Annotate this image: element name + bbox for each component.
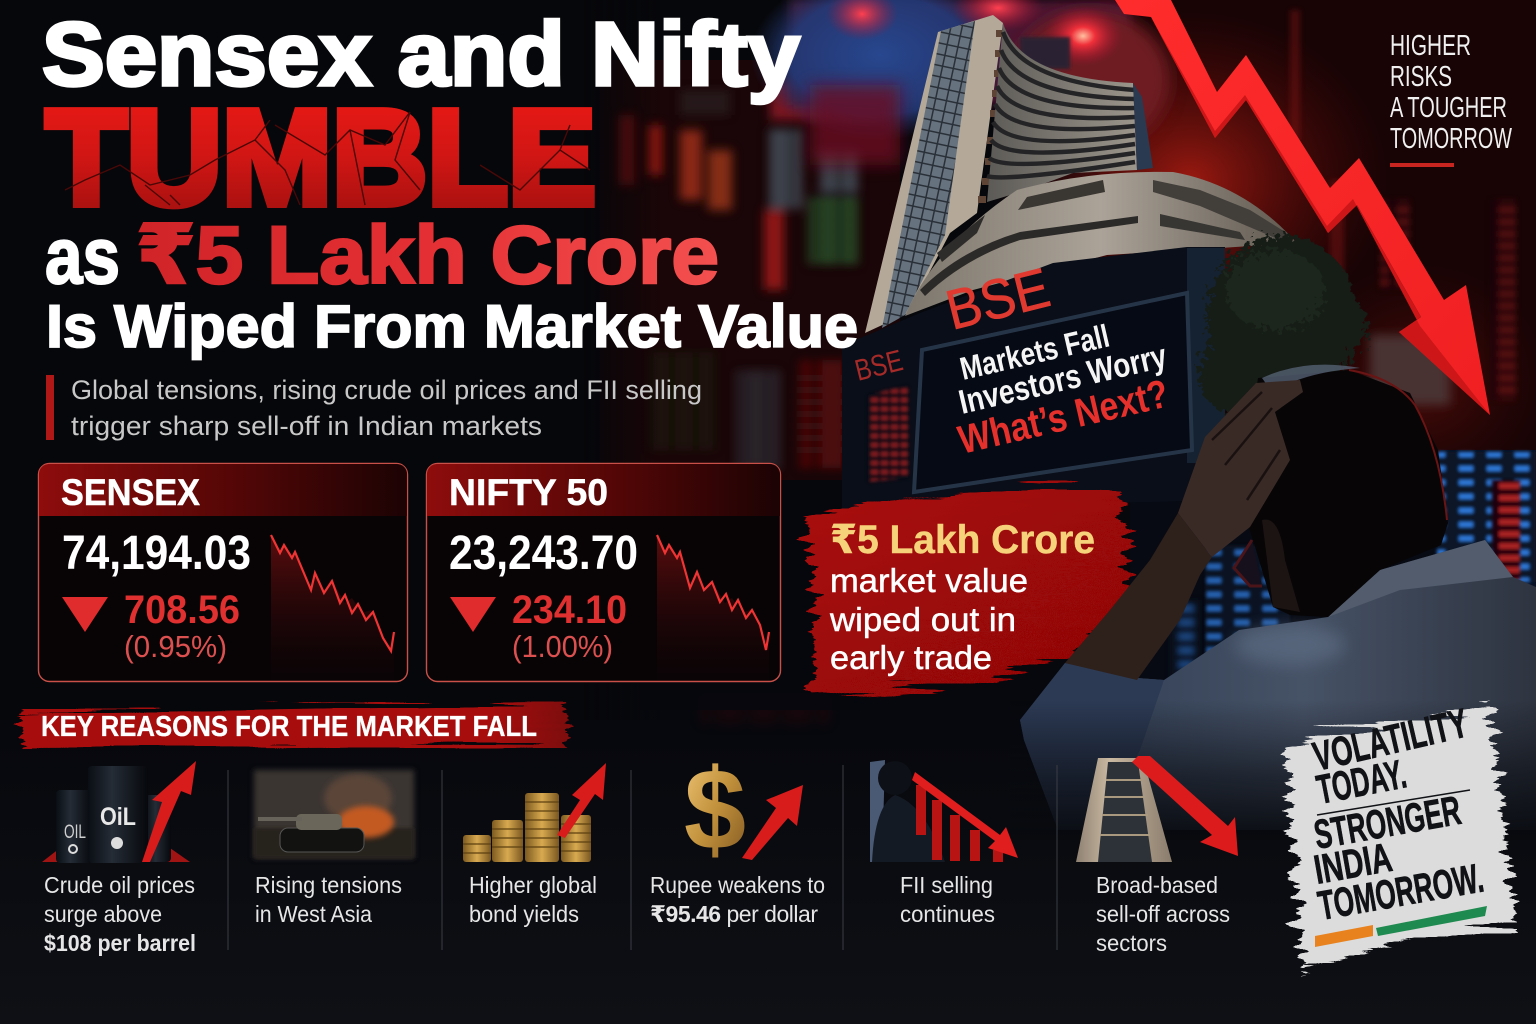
reason 3: bond yields: Higher global	[469, 872, 597, 898]
vertical dividers	[228, 765, 1057, 950]
forearm	[1065, 513, 1212, 680]
red rim light	[1349, 370, 1447, 520]
title line: Sensex and Nifty: Sensex and Nifty	[42, 5, 800, 105]
dark base	[842, 247, 1225, 510]
title line: TUMBLE: TUMBLE	[46, 82, 596, 233]
left fade	[0, 0, 580, 720]
red glow right of tower	[1100, 0, 1536, 470]
icon: oil barrels: OiL	[100, 803, 136, 831]
red up arrow	[557, 763, 606, 838]
shirt torso	[1020, 540, 1536, 830]
torn paper poster	[1284, 700, 1516, 968]
card: Sensex: 74,194.03	[62, 527, 251, 580]
reason 4: rupee: Rupee weakens to	[650, 872, 825, 898]
sparkline chart	[271, 535, 394, 680]
top right tagline	[1390, 30, 1512, 167]
reason 1: crude oil: surge above	[44, 901, 162, 927]
subtitle: trigger sharp sell-off in Indian markets	[71, 411, 542, 441]
callout: 5 lakh crore wiped: wiped out in	[829, 601, 1016, 638]
icon: coin stacks	[463, 763, 606, 862]
icon: tank in battle	[254, 770, 414, 858]
reason 1: crude oil: $108 per barrel	[44, 930, 196, 956]
card: Sensex	[38, 464, 408, 682]
top right tagline: HIGHER	[1390, 30, 1471, 62]
concrete column notches	[978, 30, 1004, 203]
reason 5: FII selling	[870, 760, 1018, 927]
icon: tower and red arrow	[1076, 756, 1238, 862]
key reasons banner: KEY REASONS FOR THE MARKET FALL	[41, 711, 537, 743]
main LED screen	[914, 293, 1192, 492]
reason 3: bond yields	[463, 763, 606, 927]
shirt collar	[1328, 540, 1513, 617]
rolled sleeve	[1020, 663, 1164, 830]
curved ribbed facade	[987, 23, 1137, 202]
card: Nifty 50: NIFTY 50	[449, 472, 608, 513]
reason 2: West Asia: Rising tensions	[255, 872, 402, 898]
reason 4: rupee: ₹95.46 per dollar	[650, 901, 818, 927]
reason 6: broad-based sell-off: sell-off across	[1096, 901, 1230, 927]
torn paper poster: INDIA	[1311, 834, 1395, 893]
neck and ear	[1262, 520, 1300, 612]
down triangle	[62, 597, 108, 632]
red up arrow	[142, 761, 196, 862]
reason 5: FII selling: FII selling	[900, 872, 993, 898]
reason 2: West Asia: in West Asia	[255, 901, 372, 927]
background: blurred market boards and red sky	[0, 0, 1536, 725]
person holding head	[1010, 365, 1536, 840]
reason 2: West Asia	[254, 770, 414, 927]
callout: 5 lakh crore wiped	[808, 485, 1130, 695]
shirt bottom fade	[1010, 700, 1536, 840]
card: Nifty 50	[426, 464, 780, 682]
card header	[39, 464, 407, 516]
tower outer frame	[865, 15, 1003, 333]
screen headline: Investors Worry	[955, 337, 1170, 422]
reason 3: bond yields: bond yields	[469, 901, 579, 927]
trading screens	[1170, 452, 1536, 695]
screen headline: Markets Fall	[956, 318, 1113, 387]
reason 4: rupee	[650, 746, 825, 927]
callout: 5 lakh crore wiped: ₹5 Lakh Crore	[830, 518, 1095, 562]
hand on head	[1178, 380, 1303, 557]
icon: oil barrels	[42, 761, 196, 863]
BSE sign: BSE	[940, 255, 1056, 342]
subtitle: Global tensions, rising crude oil prices and FII selling	[71, 375, 702, 405]
reason 5: FII selling: continues	[900, 901, 995, 927]
screen headline: What’s Next?	[954, 372, 1173, 463]
title	[42, 5, 858, 360]
dome	[905, 172, 1297, 316]
key reasons banner	[20, 703, 572, 748]
title line: as: as	[45, 211, 120, 300]
backdrop behind person	[1130, 470, 1440, 700]
card: Sensex: SENSEX	[61, 472, 200, 513]
side ticker screen	[868, 385, 908, 482]
card: Sensex: (0.95%)	[124, 629, 227, 664]
reason 1: crude oil	[42, 761, 196, 956]
card: Nifty 50: 234.10	[512, 588, 627, 632]
icon: silhouette and falling bars	[870, 760, 1018, 862]
subtitle	[46, 375, 702, 441]
reason 1: crude oil: Crude oil prices	[44, 872, 195, 898]
screen headline	[954, 318, 1173, 463]
title line: Is wiped from market value: Is Wiped From Market Value	[46, 293, 858, 360]
reason 6: broad-based sell-off	[1076, 756, 1238, 956]
card header	[427, 464, 780, 516]
torn paper poster: TODAY.	[1313, 751, 1410, 813]
sky	[790, 0, 1130, 105]
sparkline chart	[657, 535, 769, 680]
card: Nifty 50: 23,243.70	[449, 527, 638, 580]
red falling arrow	[1115, 0, 1490, 415]
glasses	[1234, 540, 1262, 586]
top right tagline: RISKS	[1390, 61, 1452, 93]
shirt highlight	[1235, 625, 1345, 665]
callout: 5 lakh crore wiped: early trade	[830, 639, 992, 676]
down triangle	[450, 597, 496, 632]
icon: oil barrels: OIL	[64, 822, 86, 843]
small side BSE sign: BSE	[852, 344, 906, 388]
tree	[1198, 235, 1368, 415]
icon: gold dollar sign: $	[684, 746, 746, 874]
title line: red amount: ₹5 Lakh Crore	[136, 210, 719, 301]
tower glass wing	[882, 21, 975, 328]
card: Nifty 50: (1.00%)	[512, 629, 613, 664]
red up arrow	[742, 785, 803, 860]
card: Sensex: 708.56	[124, 588, 240, 632]
tricolour brush stroke	[1315, 906, 1487, 947]
hair highlight	[1262, 365, 1360, 392]
reason 6: broad-based sell-off: Broad-based	[1096, 872, 1218, 898]
reason 6: broad-based sell-off: sectors	[1096, 930, 1167, 956]
BSE building	[842, 15, 1297, 510]
head	[1240, 370, 1448, 617]
dark red wall	[600, 60, 900, 480]
callout: 5 lakh crore wiped: market value	[830, 562, 1028, 599]
